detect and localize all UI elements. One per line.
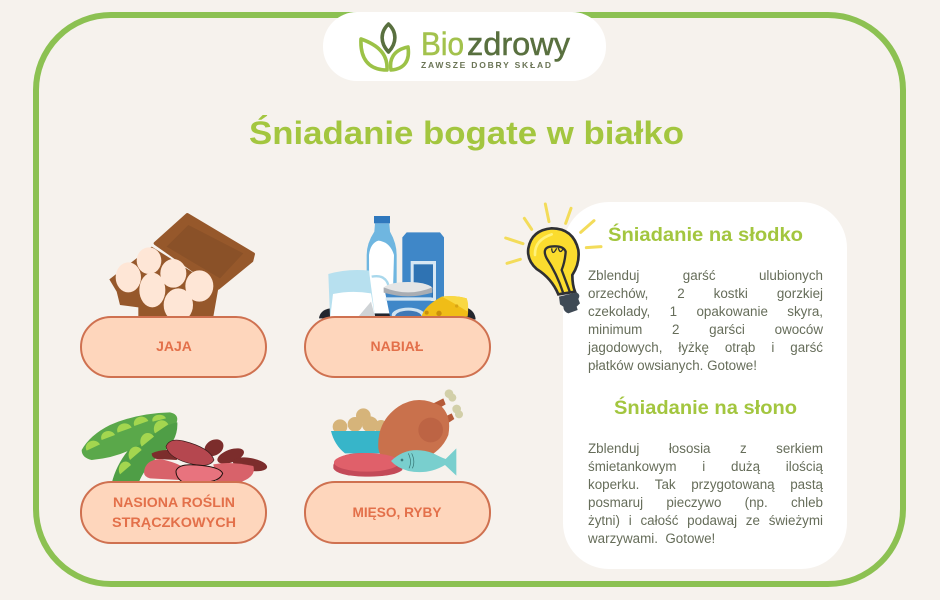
text block: salty recipe: koperku. Tak przygotowaną pastą [588,477,823,492]
title: Śniadanie bogate w białko [249,115,684,151]
icon: egg carton [109,215,253,322]
label pill: NABIAŁ [305,317,490,377]
logo tagline: ZAWSZE DOBRY SKŁAD [421,60,551,70]
heading: sweet breakfast: Śniadanie na słodko [608,224,803,246]
label pill: NASIONA ROŚLIN STRĄCZKOWYCH: STRĄCZKOWYCH [112,514,236,530]
logo: Biozdrowy: zdrowy [467,26,570,62]
label pill: MIĘSO, RYBY: MIĘSO, RYBY [352,504,442,520]
logo wordmark: Bio [421,26,464,62]
text block: sweet recipe: czekolady, 1 opakowanie skyra, [588,304,823,319]
text block: salty recipe: żytni) i całość podawaj ze świeżymi [588,513,823,528]
label pill: MIĘSO, RYBY [305,482,490,543]
icon: pea pods and beans [82,412,268,483]
text block: sweet recipe: jagodowych, łyżkę otrąb i garść [588,340,823,355]
label pill: NASIONA ROŚLIN STRĄCZKOWYCH [81,482,266,543]
text block: salty recipe [588,441,823,546]
text block: sweet recipe: Zblenduj garść ulubionych [588,268,823,283]
label pill: NASIONA ROŚLIN STRĄCZKOWYCH: NASIONA ROŚLIN [113,493,235,510]
text block: salty recipe: posmaruj pieczywo (np. chleb [588,495,823,510]
icon: dairy products [319,216,476,323]
text block: salty recipe: śmietankowym i dużą ilością [588,459,823,474]
icon: light bulb [506,204,601,313]
icon: meat and fish [331,389,463,477]
logo: Biozdrowy [323,12,606,81]
icon: logo leaves [361,24,408,70]
text block: salty recipe: Zblenduj łososia z serkiem [588,441,823,456]
text block: sweet recipe: płatków owsianych. Gotowe! [588,358,757,373]
text block: salty recipe: warzywami. Gotowe! [588,531,715,546]
label pill: JAJA [81,317,266,377]
text block: sweet recipe: minimum 2 garści owoców [588,322,823,337]
text block: sweet recipe [588,268,823,373]
label pill: JAJA: JAJA [156,338,192,354]
heading: salty breakfast: Śniadanie na słono [614,397,797,419]
panel: recipes [563,202,847,569]
text block: sweet recipe: orzechów, 2 kostki gorzkiej [588,286,823,301]
label pill: NABIAŁ: NABIAŁ [371,338,424,354]
